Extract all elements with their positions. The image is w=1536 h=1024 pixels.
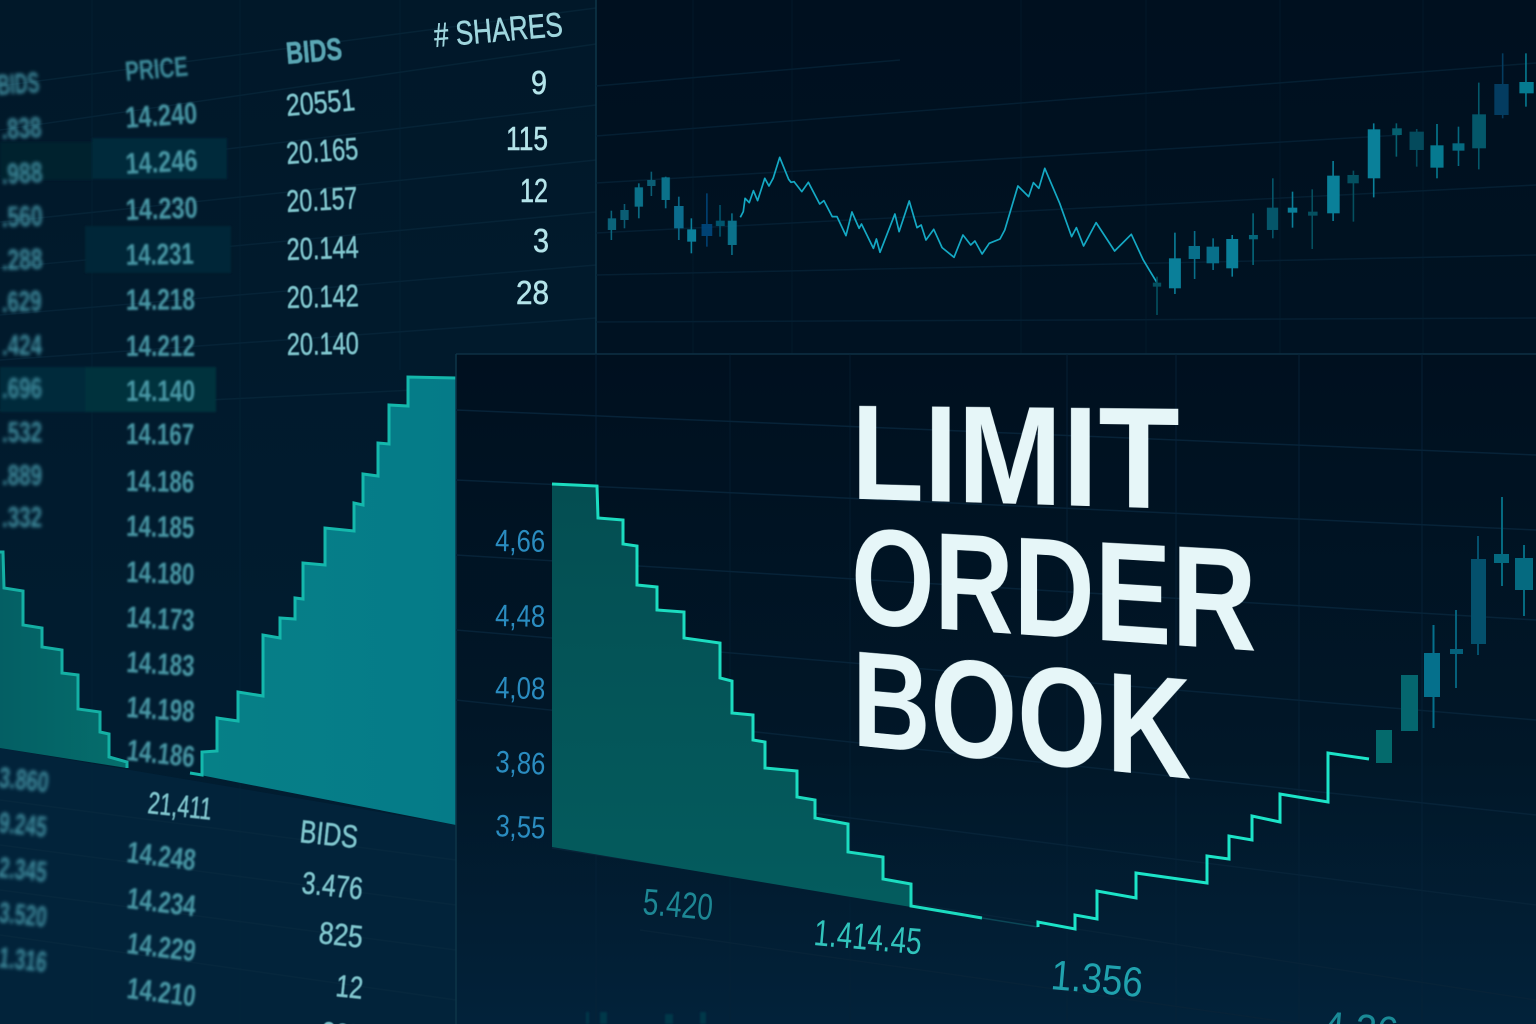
header: shares: # SHARES [432,6,564,55]
table column: bids: 3.476 [300,865,365,906]
table column: shares: 115 [506,120,548,157]
depth chart: foreground bid area [552,484,1038,927]
table column: price: 14.140 [126,375,195,408]
y axis labels: 3,86 [495,744,546,782]
table column: shares [432,6,564,311]
x axis labels: 1.356 [1049,951,1145,1006]
panel: left order table background [0,0,596,1024]
table column: price: 14.229 [125,927,198,968]
depth chart: foreground ask line [1038,753,1369,929]
table column: bids: 20.142 [286,278,359,315]
header: price: PRICE [124,51,189,87]
table column: far left values: .560 [1,201,43,234]
depth chart: left ask side [190,377,456,825]
table column: price: 14.240 [124,97,198,135]
table column: price: 14.173 [126,601,195,638]
table column: price: 14.230 [125,192,198,227]
table column: far left values: .629 [1,286,42,319]
table column: price: 14.185 [126,510,195,545]
table column: far left values: .332 [2,502,42,534]
table column: price: 14.210 [125,972,198,1013]
table column: shares: 9 [531,64,547,101]
x axis labels: 1.414.45 [812,912,923,962]
table column: bids: BIDS [298,813,360,855]
price line [740,157,1157,283]
table column: bids: 20.144 [286,230,359,267]
y axis labels: 4,08 [495,670,546,706]
candles: foreground right [1376,497,1533,763]
table column: bids: 20.165 [285,131,359,171]
row highlights [0,138,231,412]
table column: far left values: .696 [2,373,42,405]
table column: shares: 3 [533,222,549,259]
candles left [608,172,737,255]
table column: price: 14.231 [126,238,194,272]
y axis labels: 3,55 [495,808,546,846]
table column: bids: 825 [317,915,365,955]
y axis labels: 4,48 [495,598,545,634]
table column: far left values: .424 [2,330,42,362]
table column: price: 14.212 [126,330,195,363]
table column: price: 14.246 [125,144,198,181]
table column: far left values: .988 [1,157,43,191]
table column: bids: 12 [334,968,365,1006]
table column: price: 14.234 [125,882,198,923]
chart: upper price line and candlesticks [608,53,1534,315]
table column: far left values: .889 [2,460,42,492]
table column: shares: 28 [516,274,549,311]
table column: far left values [0,67,50,979]
table column: price: 14.186 [126,465,194,499]
table column: bids: 20.140 [287,326,359,362]
table column: price: 14.198 [126,691,196,729]
y axis labels: 4,66 [495,523,545,559]
table column: price: 14.183 [126,646,195,683]
table column: far left values: .532 [2,417,42,449]
table column: bids: 21,411 [146,785,214,827]
depth chart: left bid side [0,552,127,768]
table column: bids: 20551 [285,82,356,123]
table column: bids: 20.157 [286,180,358,219]
table column: price: 14.248 [125,836,198,877]
table column: far left values: .838 [1,112,42,146]
panel: foreground depth chart [456,354,1536,1024]
table column: price: 14.180 [126,556,195,591]
table column: bids [146,31,365,1024]
table column: shares: 12 [520,172,548,209]
table column: price [124,51,198,1013]
x axis labels: 5.420 [641,881,715,928]
grid: upper right [596,0,1536,354]
table column: far left values: .288 [1,244,43,277]
y axis labels [495,523,546,846]
title: ORDER [851,500,1257,683]
table column: price: 14.218 [126,283,195,317]
candles right [1153,53,1534,315]
title: LIMIT [851,377,1180,541]
header: bids: BIDS [285,31,343,71]
title: BOOK [852,623,1191,811]
table column: price: 14.167 [126,418,194,452]
x axis labels [641,881,1400,1024]
table column: price: 14.186 [125,734,196,774]
